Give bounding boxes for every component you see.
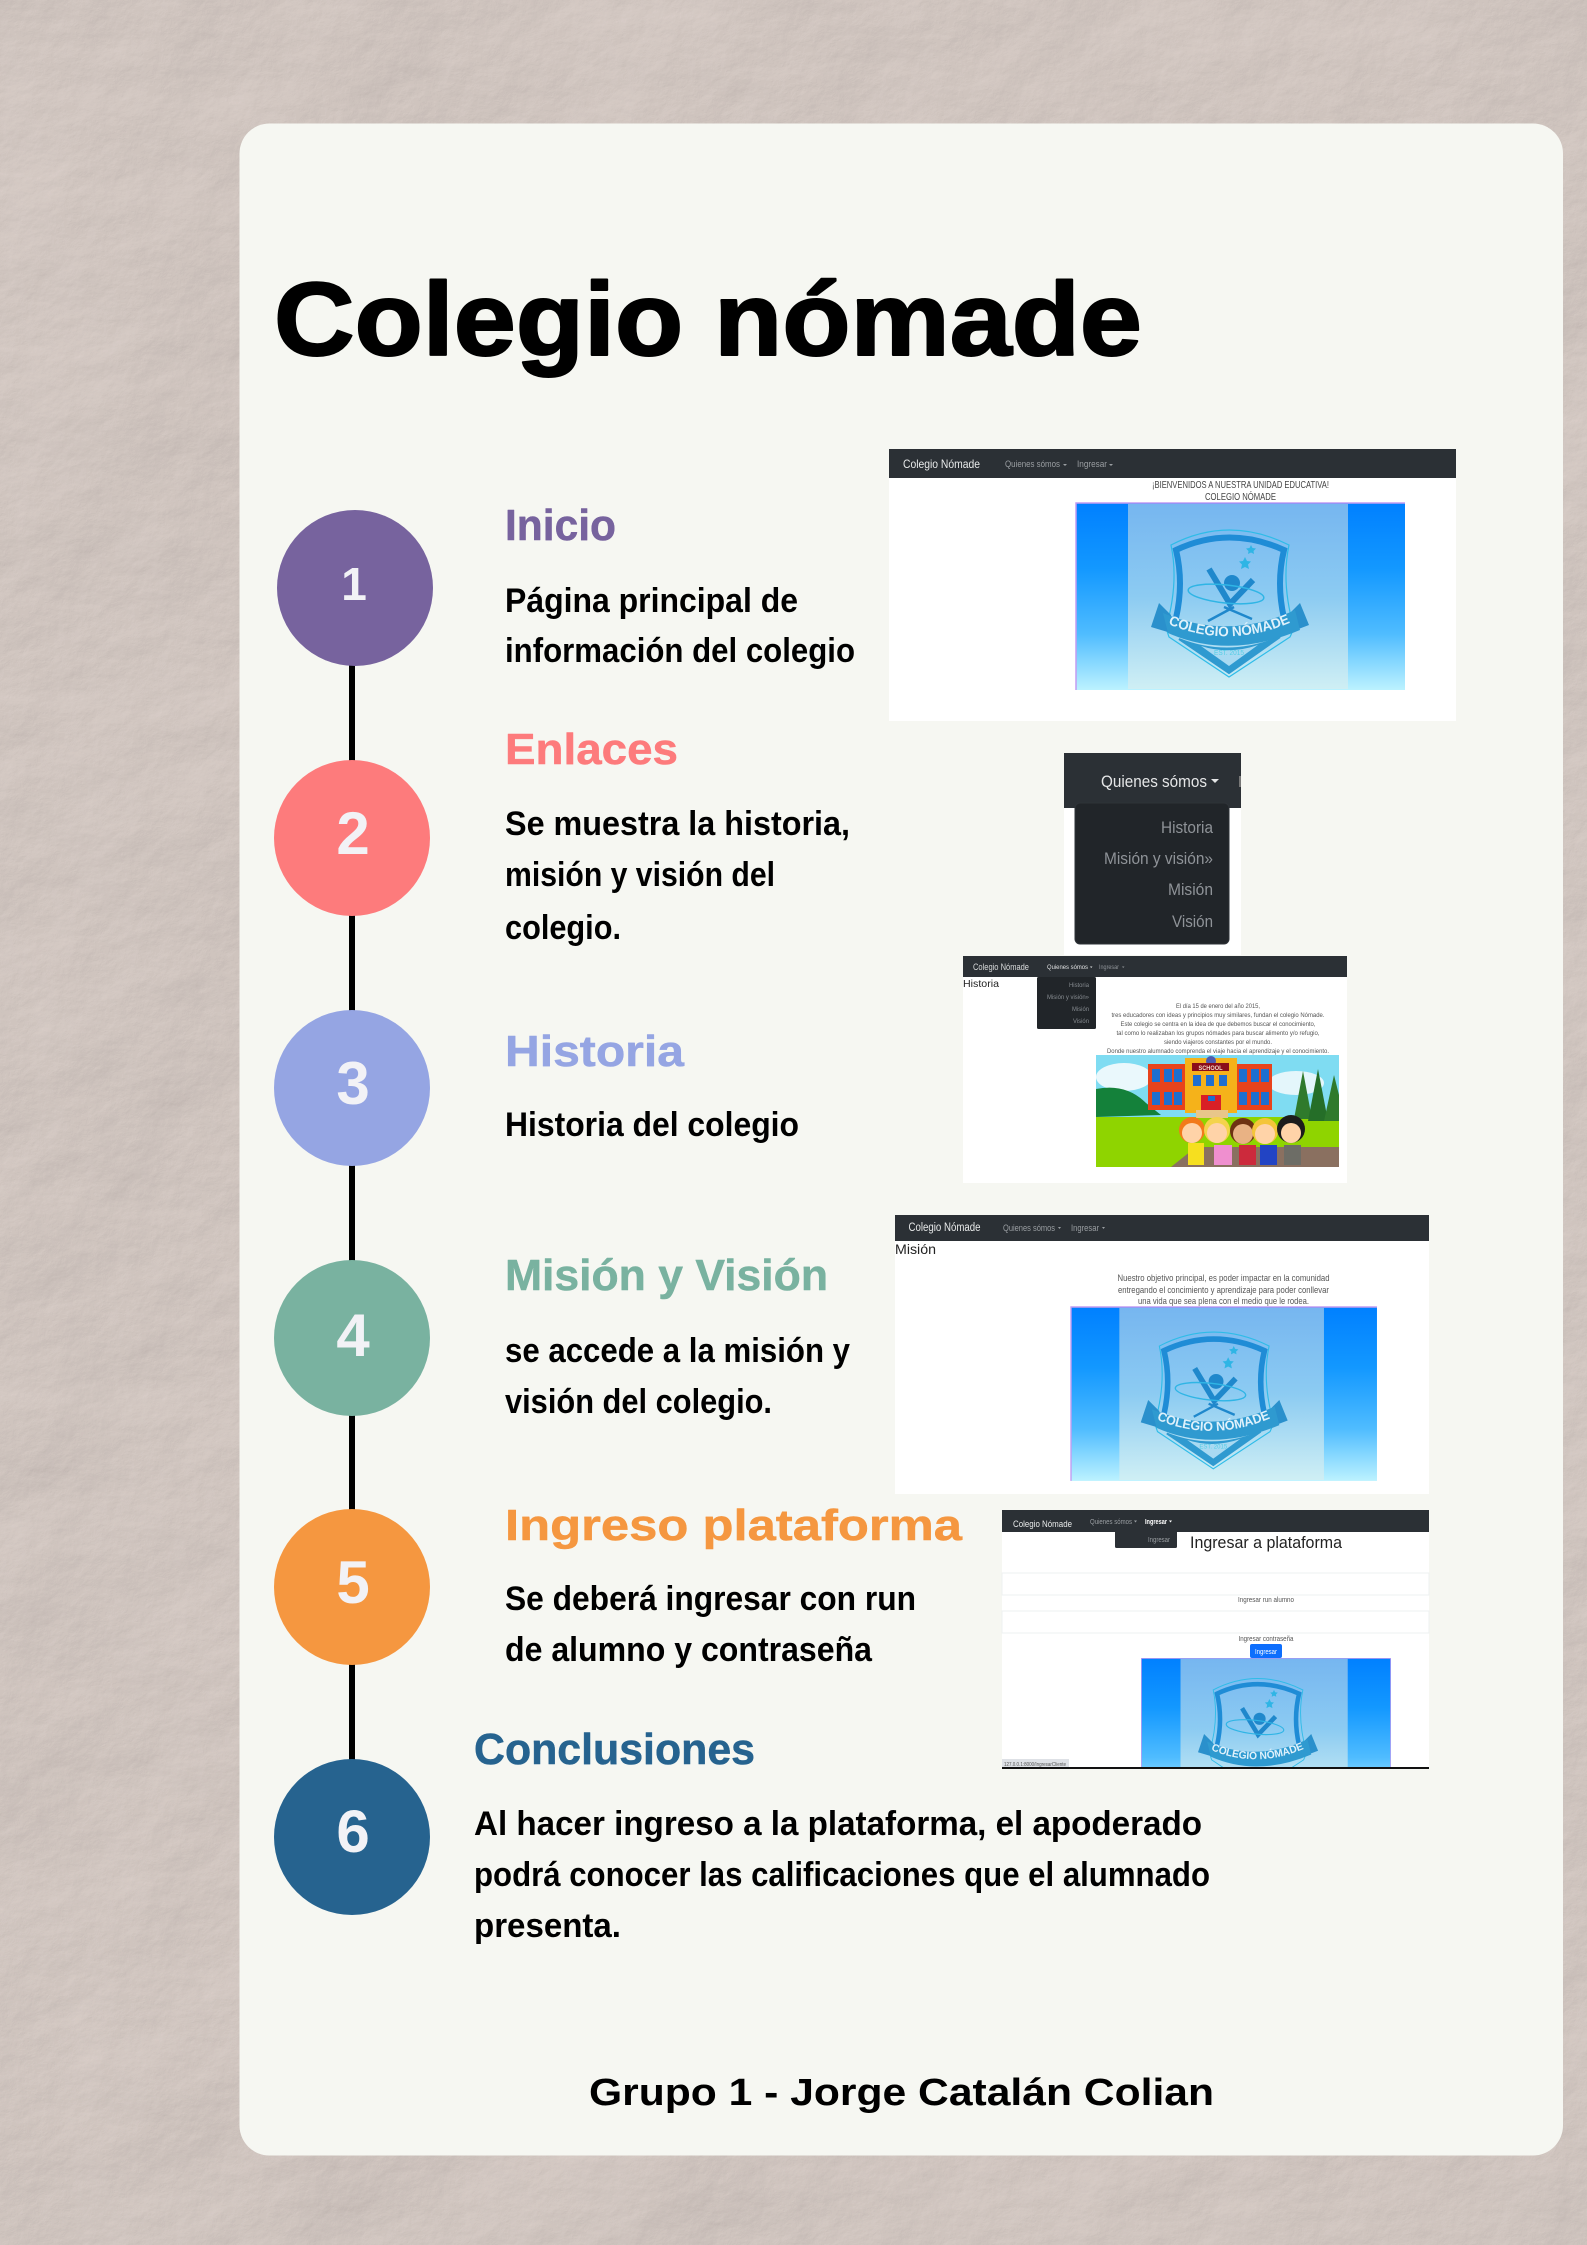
step 4 number circle: 4 — [336, 1302, 370, 1369]
step 6 number circle: 6 — [336, 1798, 370, 1865]
step 4 description: se accede a la misión y — [505, 1332, 850, 1370]
screenshot 3: history page — [963, 956, 1347, 1183]
screenshot 4: mission page: Misión — [895, 1241, 936, 1257]
screenshot 5: login page: Ingresar contraseña — [1238, 1634, 1294, 1643]
step 1 description: Página principal de — [505, 582, 798, 620]
step 3 heading: Historia — [505, 1027, 685, 1076]
screenshot 3: history page: Este colegio se centra en la idea de que debemos buscar el conocimiento, — [1120, 1021, 1316, 1028]
logo image 4 — [1070, 1306, 1377, 1481]
screenshot 4: mission page: una vida que sea plena con el medio que le rodea. — [1138, 1296, 1309, 1307]
screenshot 3: history page: Historia — [1069, 982, 1089, 989]
screenshot 5: login page: Ingresar — [1255, 1649, 1278, 1656]
screenshot 3: history page: Donde nuestro alumnado comprenda el viaje hacia el aprendizaje y el conocimiento. — [1107, 1048, 1329, 1055]
screenshot 5: login page — [1002, 1510, 1429, 1769]
step 3 number circle: 3 — [336, 1050, 370, 1117]
step 1 number circle: 1 — [341, 558, 367, 610]
screenshot 1: home page — [889, 449, 1456, 721]
step 1 — [277, 501, 855, 670]
screenshot 1: home page: ¡BIENVENIDOS A NUESTRA UNIDAD EDUCATIVA! — [1152, 480, 1329, 491]
screenshot 4: mission page — [895, 1215, 1429, 1494]
screenshot 5: login page: 127.0.0.1:8000/IngresarCliente — [1004, 1762, 1066, 1768]
screenshot 5: login page: Colegio Nómade — [1013, 1519, 1072, 1530]
screenshot 3: history page: Colegio Nómade — [973, 962, 1029, 972]
step 6 heading: Conclusiones — [474, 1725, 755, 1774]
logo image 1: COLEGIO NÓMADE — [1170, 614, 1290, 636]
screenshot 3: history page: Historia — [963, 978, 999, 990]
screenshot 3: history page: Ingresar — [1099, 964, 1120, 971]
screenshot 4: mission page: Ingresar — [1071, 1223, 1099, 1233]
step 3 — [274, 1010, 799, 1166]
step 5 heading: Ingreso plataforma — [505, 1501, 963, 1550]
screenshot 2: dropdown menu: Visión — [1172, 912, 1213, 931]
step 2 number circle — [274, 760, 430, 916]
screenshot 5: login page: Ingresar run alumno — [1238, 1595, 1294, 1604]
step 2 — [274, 725, 850, 947]
logo image 5: COLEGIO NÓMADE — [1212, 1742, 1304, 1760]
screenshot 1: home page: Ingresar — [1077, 459, 1107, 470]
step 4 — [274, 1251, 850, 1421]
screenshot 4: mission page: entregando el concimiento y aprendizaje para poder conllevar — [1118, 1285, 1329, 1296]
screenshot 1: home page: Colegio Nómade — [903, 457, 980, 471]
screenshot 4: mission page: Quienes sómos — [1003, 1223, 1055, 1233]
screenshot 5: login page: Ingresar — [1148, 1537, 1171, 1544]
screenshot 2: dropdown menu: Quienes sómos — [1101, 772, 1207, 791]
screenshot 3: history page: Misión y visión» — [1047, 994, 1089, 1001]
panel: main card — [240, 124, 1563, 2156]
step 2 description: misión y visión del — [505, 856, 775, 894]
logo image 4: COLEGIO NÓMADE — [1158, 1410, 1270, 1431]
step 4 heading: Misión y Visión — [505, 1251, 828, 1300]
school illustration: SCHOOL — [1198, 1065, 1223, 1072]
step 4 description: visión del colegio. — [505, 1383, 772, 1421]
step 6 description: Al hacer ingreso a la plataforma, el apoderado — [474, 1805, 1202, 1843]
screenshot 5: login page: Ingresar a plataforma — [1190, 1533, 1343, 1552]
logo image 4: EST. 2015 — [1199, 1443, 1228, 1450]
screenshot 5: login page: Quienes sómos — [1090, 1519, 1132, 1526]
screenshot 4: mission page: Nuestro objetivo principal, es poder impactar en la comunidad — [1118, 1273, 1330, 1284]
timeline connector line — [349, 660, 355, 1770]
step 2 description: colegio. — [505, 909, 621, 947]
screenshot 2: dropdown menu — [1064, 753, 1241, 955]
logo image 5 — [1141, 1658, 1391, 1767]
screenshot 2: dropdown menu: Misión — [1168, 880, 1213, 899]
step 5 number circle — [274, 1509, 430, 1665]
title: Colegio nómade — [274, 262, 1142, 378]
children — [1179, 1115, 1305, 1165]
step 6 — [274, 1725, 1210, 1945]
screenshot 3: history page: Misión — [1072, 1006, 1089, 1013]
step 5 description: de alumno y contraseña — [505, 1631, 873, 1669]
step 2 description: Se muestra la historia, — [505, 805, 850, 843]
step 1 description: información del colegio — [505, 632, 855, 670]
footer credit: Grupo 1 - Jorge Catalán Colian — [589, 2072, 1214, 2114]
step 6 description — [474, 1805, 1210, 1945]
screenshot 3: history page: Quienes sómos — [1047, 964, 1089, 971]
logo image 1 — [1075, 502, 1405, 690]
step 5 description — [505, 1580, 916, 1669]
screenshot 5: login page: Ingresar — [1145, 1519, 1167, 1526]
step 1 number circle — [277, 510, 433, 666]
screenshot 1: home page: COLEGIO NÓMADE — [1205, 490, 1276, 503]
screenshot 2: dropdown menu: Historia — [1161, 818, 1213, 837]
step 3 description: Historia del colegio — [505, 1106, 799, 1144]
step 5 number circle: 5 — [336, 1549, 370, 1616]
step 2 number circle: 2 — [336, 800, 370, 867]
step 2 heading: Enlaces — [505, 725, 678, 774]
step 2 description — [505, 805, 850, 947]
school illustration — [1096, 1055, 1339, 1167]
step 5 — [274, 1501, 963, 1669]
screenshot 3: history page: Visión — [1073, 1018, 1089, 1025]
screenshot 3: history page: El día 15 de enero del año 2015, — [1176, 1003, 1260, 1010]
step 1 heading: Inicio — [505, 501, 616, 550]
step 4 number circle — [274, 1260, 430, 1416]
screenshot 2: dropdown menu: Misión y visión» — [1104, 849, 1213, 868]
step 6 description: presenta. — [474, 1907, 621, 1945]
step 6 number circle — [274, 1759, 430, 1915]
screenshot 3: history page: tres educadores con ideas y principios muy similares, fundan el colegio Nómade. — [1112, 1012, 1325, 1019]
step 1 description — [505, 582, 855, 670]
screenshot 3: history page: tal como lo realizaban los grupos nómades para buscar alimento y/o refugio, — [1116, 1030, 1320, 1037]
step 3 number circle — [274, 1010, 430, 1166]
logo image 1: EST. 2015 — [1214, 650, 1244, 657]
screenshot 3: history page: siendo viajeros constantes por el mundo. — [1164, 1039, 1272, 1046]
step 4 description — [505, 1332, 850, 1421]
step 5 description: Se deberá ingresar con run — [505, 1580, 916, 1618]
screenshot 1: home page: Quienes sómos — [1005, 459, 1060, 470]
step 6 description: podrá conocer las calificaciones que el alumnado — [474, 1856, 1210, 1894]
screenshot 4: mission page: Colegio Nómade — [908, 1222, 980, 1234]
